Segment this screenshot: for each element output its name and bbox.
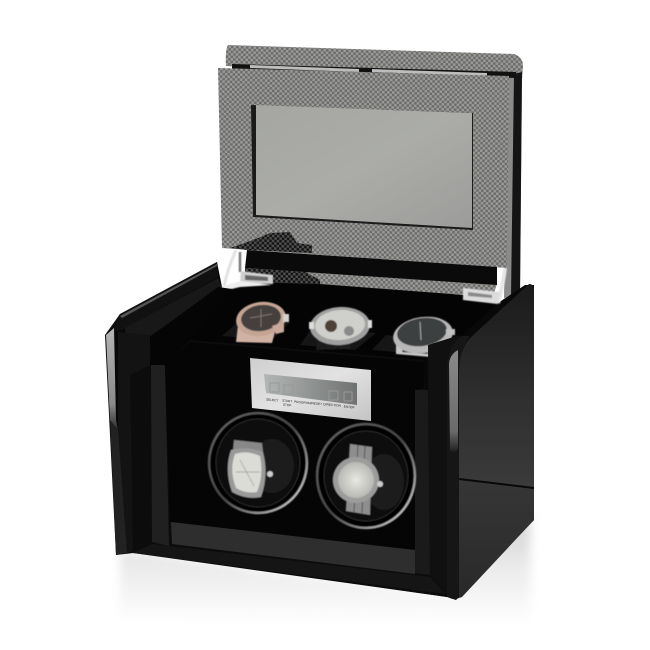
watch tray slots [222, 320, 455, 356]
control panel [250, 358, 371, 421]
dark carbon reflection: upper [230, 232, 312, 253]
lid right edge [504, 72, 522, 298]
highlight [106, 328, 118, 430]
lid lower dark band [245, 250, 497, 285]
button labels: PROGRAM/RESET [294, 400, 322, 406]
panel: open lid [218, 45, 523, 298]
right step [415, 390, 430, 575]
button labels: START [282, 399, 292, 403]
brushed metal plate [250, 358, 371, 421]
side face lower [459, 480, 534, 598]
felt lower tray [133, 522, 446, 594]
winder: left [209, 413, 307, 513]
floor reflection [120, 515, 531, 625]
button labels: ENTER [344, 405, 355, 410]
panel: right polished side [428, 284, 534, 599]
watch: tonneau [228, 440, 273, 498]
side column [428, 335, 460, 595]
panel: velvet front [130, 340, 447, 597]
lid top edge [226, 45, 523, 80]
side column [118, 332, 151, 553]
button labels: SELECT [266, 397, 278, 403]
hinge: left [214, 250, 273, 292]
lcd digits [270, 383, 352, 401]
mirror [251, 105, 473, 230]
panel: box interior [190, 283, 496, 360]
inner velvet [165, 342, 425, 550]
button labels: STOP [283, 403, 292, 407]
lid hinge strip [232, 64, 516, 78]
side lip [125, 278, 222, 375]
side top edge [108, 262, 218, 332]
lid inner carbon panel [218, 68, 509, 268]
side face [459, 284, 534, 487]
button labels [266, 397, 355, 410]
watch: dark dial [391, 313, 455, 357]
panel: left polished side [106, 262, 232, 555]
panel: box silhouette [105, 262, 534, 600]
lcd display [264, 374, 357, 405]
front edge [447, 336, 470, 599]
gloss band [449, 350, 458, 452]
winder: right [317, 424, 415, 528]
watch: rose gold [234, 299, 289, 343]
button labels: DIRECTION [323, 402, 342, 408]
hinge: right [463, 268, 505, 304]
watch: steel bracelet [333, 444, 383, 515]
left step [151, 365, 169, 546]
watch: silver skeleton [309, 305, 372, 350]
lid lower carbon strip [245, 268, 497, 296]
dark carbon reflection: lower [245, 268, 320, 288]
recess wedge [150, 287, 232, 365]
